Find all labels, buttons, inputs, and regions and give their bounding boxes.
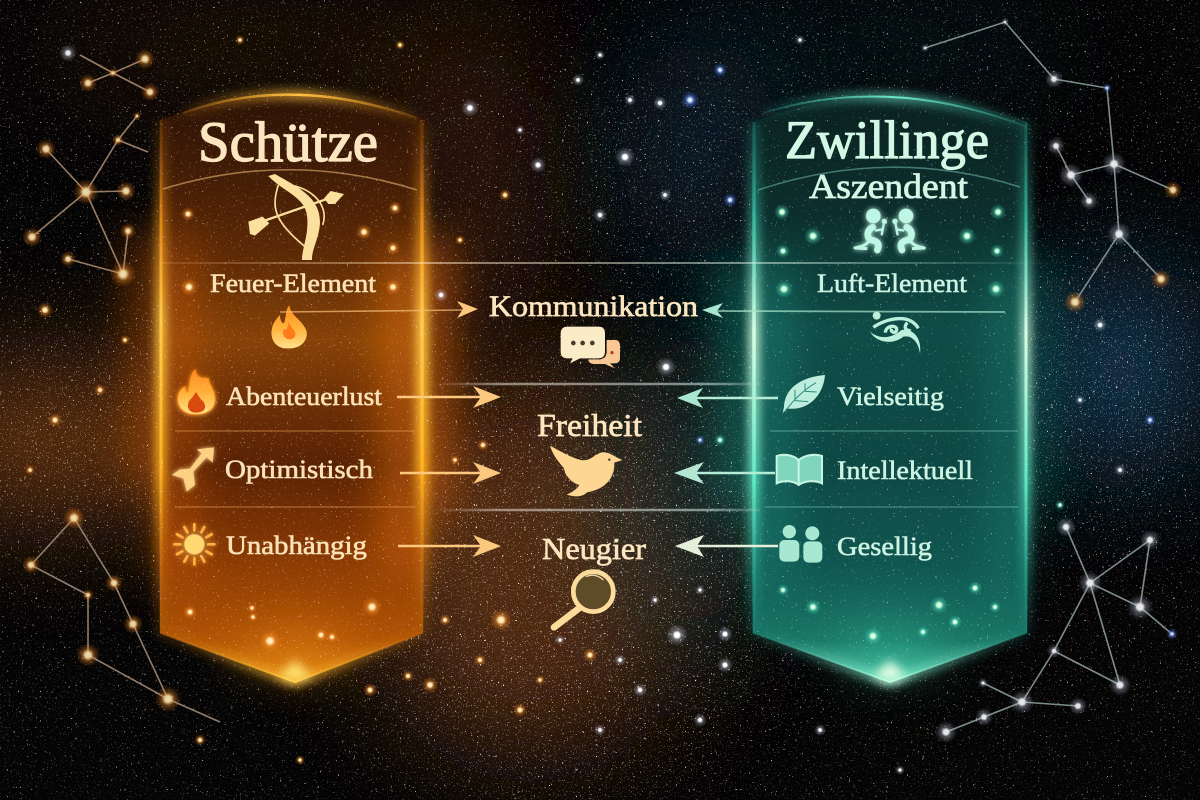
label: Feuer-Element: Feuer-Element xyxy=(210,269,377,298)
panel sparkles: fire xyxy=(180,201,402,652)
icon: arrow xyxy=(172,447,214,492)
icon: flame with glow xyxy=(178,370,215,414)
icon: dove xyxy=(550,446,623,496)
row: Vielseitig xyxy=(783,375,944,413)
panel heading: Schütze: Schütze xyxy=(198,111,378,174)
trait: Neugier xyxy=(542,531,647,627)
label: Neugier: Neugier xyxy=(542,531,647,566)
constellation: bottom left xyxy=(22,507,220,722)
icon: speech bubbles xyxy=(561,327,620,368)
icon: twin figures xyxy=(855,209,924,250)
icon: sun xyxy=(174,524,214,564)
label: Vielseitig: Vielseitig xyxy=(837,382,944,411)
arrow: Optimistisch to center xyxy=(400,462,501,484)
label: Kommunikation: Kommunikation xyxy=(489,290,698,323)
trait: Kommunikation xyxy=(489,290,698,368)
arrow: Gesellig to center xyxy=(675,535,778,557)
row: Abenteuerlust xyxy=(178,370,383,414)
arrows: Zwillinge traits to center xyxy=(674,303,1005,557)
icon: two people xyxy=(779,525,822,563)
label: Unabhängig: Unabhängig xyxy=(226,531,367,560)
arrow: Intellektuell to center xyxy=(674,462,775,484)
icon: magnifying glass xyxy=(554,572,613,627)
center column: shared traits xyxy=(160,263,1060,627)
arrow: Vielseitig to center xyxy=(677,388,778,408)
trait: Freiheit xyxy=(537,407,642,496)
icon: bow and arrow xyxy=(248,174,344,260)
row: Gesellig xyxy=(779,525,932,563)
arrow: Feuer to Kommunikation xyxy=(280,301,478,318)
label: Gesellig: Gesellig xyxy=(837,532,932,561)
constellation: top left xyxy=(22,44,159,287)
icon: flame xyxy=(271,305,307,348)
panel subheading: Aszendent: Aszendent xyxy=(809,167,968,206)
row: Unabhängig xyxy=(174,524,367,564)
label: Freiheit: Freiheit xyxy=(537,407,642,443)
label: Abenteuerlust: Abenteuerlust xyxy=(226,382,383,411)
row: Optimistisch xyxy=(172,447,373,492)
panel: Schütze xyxy=(160,95,423,682)
panel sparkles: air xyxy=(774,204,1006,645)
icon: open book xyxy=(777,455,822,485)
arrow: Abenteuerlust to center xyxy=(397,386,501,408)
panel: Zwillinge Aszendent xyxy=(753,96,1027,682)
label: Optimistisch: Optimistisch xyxy=(225,455,373,484)
icon: leaf xyxy=(783,375,825,413)
panel heading: Zwillinge: Zwillinge xyxy=(785,110,989,170)
constellation: bottom right xyxy=(935,517,1178,743)
label: Intellektuell: Intellektuell xyxy=(837,456,973,485)
arrow: Luft to Kommunikation xyxy=(702,303,1005,318)
label: Luft-Element: Luft-Element xyxy=(817,269,968,298)
row: Intellektuell xyxy=(777,455,973,485)
arrow: Unabhängig to center xyxy=(398,535,501,557)
panel glow: outer bleed of both panels xyxy=(130,230,1055,510)
constellation: top right xyxy=(921,18,1182,313)
arrows: Schütze traits to center xyxy=(280,301,501,557)
icon: wind swirl xyxy=(870,312,920,353)
